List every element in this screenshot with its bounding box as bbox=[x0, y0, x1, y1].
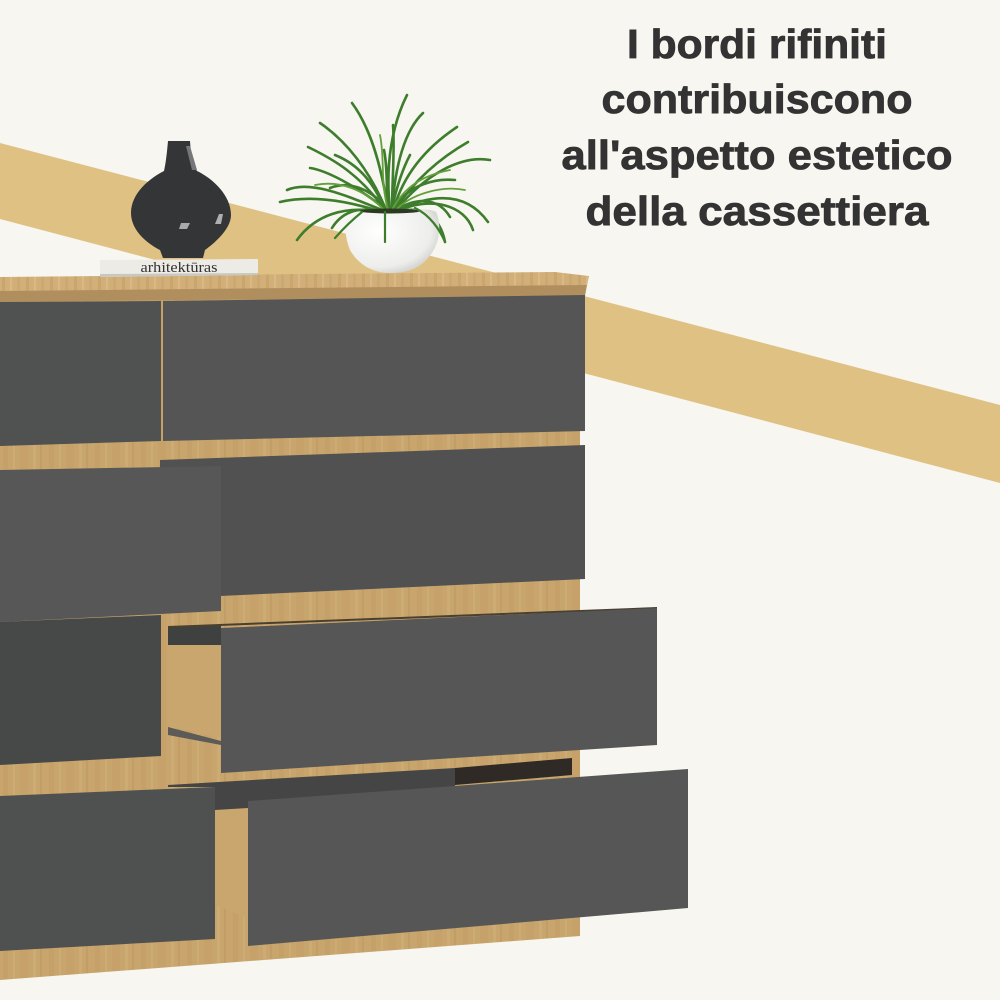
drawer: bottom right, open bbox=[248, 769, 688, 946]
title: della cassettiera bbox=[586, 188, 930, 234]
top board lower edge bbox=[0, 285, 587, 302]
dark recess right of bottom opening bbox=[455, 758, 572, 785]
light leaves bbox=[315, 135, 465, 210]
drawer: bottom left, open bbox=[0, 787, 215, 951]
drawer: top right bbox=[163, 295, 585, 441]
front drooping leaves bbox=[335, 208, 445, 242]
title: I bordi rifiniti bbox=[627, 21, 887, 67]
plant in white pot bbox=[280, 95, 490, 273]
book bbox=[100, 259, 258, 277]
bottom drawer interior side bbox=[215, 808, 248, 918]
drawer: top left bbox=[0, 301, 161, 446]
pot bbox=[346, 209, 439, 273]
opening behind bottom right drawer bbox=[168, 768, 455, 810]
diagonal gold band bbox=[0, 143, 1000, 483]
drawer: third right, open bbox=[221, 608, 657, 773]
cabinet body bbox=[0, 286, 580, 980]
opening behind third right drawer bbox=[168, 625, 221, 645]
drawer: second right bbox=[160, 445, 585, 596]
title: contribuiscono bbox=[602, 76, 912, 122]
third drawer interior side bbox=[168, 645, 221, 738]
vase bbox=[131, 141, 231, 258]
top board bbox=[0, 272, 589, 292]
soil bbox=[360, 208, 420, 214]
title bbox=[562, 21, 952, 234]
chest of drawers bbox=[0, 272, 688, 980]
leaves bbox=[280, 95, 490, 242]
drawer: third left bbox=[0, 615, 161, 765]
title: all'aspetto estetico bbox=[562, 132, 952, 178]
shadow above third right drawer bbox=[168, 607, 657, 628]
drawer: second left, open bbox=[0, 466, 221, 622]
book: arhitektūras bbox=[140, 260, 218, 276]
third drawer rail bbox=[168, 727, 221, 745]
